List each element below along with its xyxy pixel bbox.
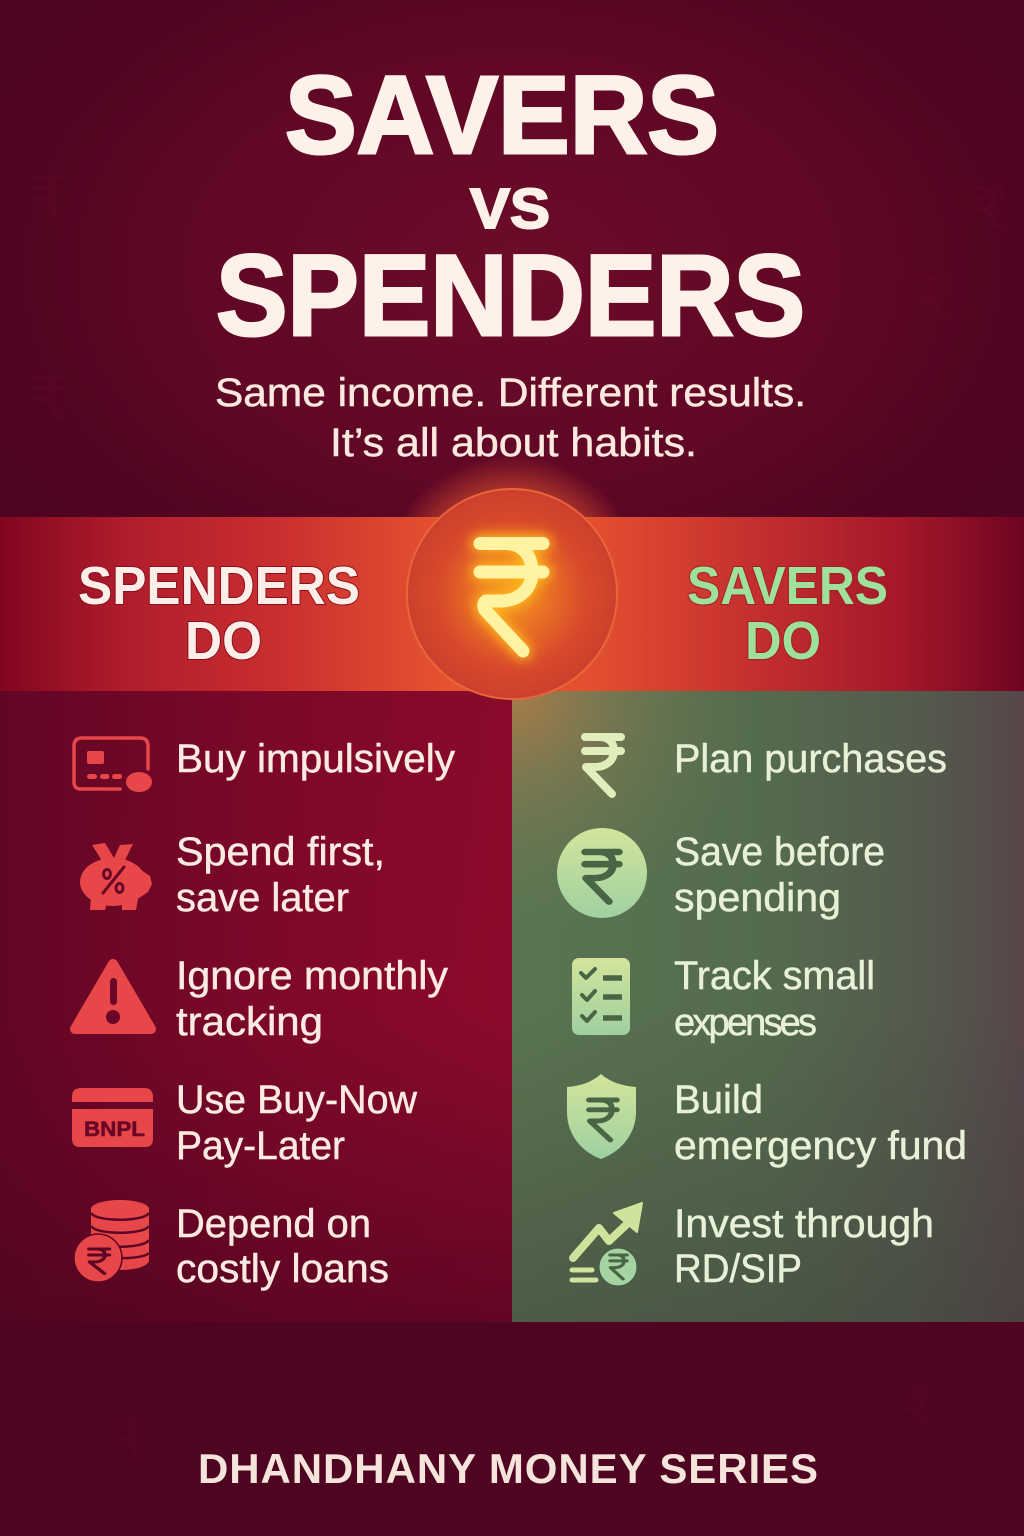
item: save before spending: Save before [674, 830, 885, 874]
icon: shield [567, 1074, 636, 1159]
item: invest: RD/SIP [674, 1247, 802, 1291]
icon: coin stack with rupee [74, 1200, 149, 1282]
panel: spenders [0, 690, 512, 1322]
item: emergency fund: Build [674, 1078, 763, 1122]
icon: rupee circle [557, 828, 647, 918]
header band [0, 517, 1024, 691]
item: save before spending: spending [674, 876, 841, 920]
item: ignore tracking: Ignore monthly [176, 954, 448, 998]
savers do heading: DO [745, 611, 821, 671]
icon: checklist [572, 958, 630, 1035]
subtitle [215, 371, 806, 465]
faint rupee background pattern: ₹ [30, 166, 68, 233]
savers list [674, 737, 967, 1291]
item: use bnpl: Pay-Later [176, 1124, 345, 1168]
title: VS [470, 177, 550, 241]
title: SAVERS [285, 54, 719, 177]
faint rupee background pattern: ₹ [900, 1376, 938, 1443]
item: costly loans: Depend on [176, 1202, 371, 1246]
spenders do heading [78, 556, 360, 671]
item: spend first: Spend first, [176, 830, 385, 874]
item: costly loans: costly loans [176, 1247, 389, 1291]
icon: rupee [585, 737, 621, 794]
icon: credit card [74, 738, 152, 792]
icon: warning triangle [75, 964, 151, 1029]
item: track expenses: Track small [674, 954, 875, 998]
item: spend first: save later [176, 876, 349, 920]
item: track expenses: expenses [674, 1002, 817, 1044]
faint rupee background pattern: ₹ [915, 266, 953, 333]
savers do heading: SAVERS [687, 556, 888, 616]
faint rupee background pattern: ₹ [110, 1406, 148, 1473]
item: ignore tracking: tracking [176, 1000, 323, 1044]
faint rupee background pattern: ₹ [970, 176, 1008, 243]
spenders do heading: SPENDERS [78, 556, 360, 616]
title [216, 54, 805, 360]
faint rupee background pattern: ₹ [30, 366, 68, 433]
footer: DHANDHANY MONEY SERIES [198, 1445, 818, 1492]
item: emergency fund: emergency fund [674, 1124, 967, 1168]
savers do heading [687, 556, 888, 671]
item: plan purchases: Plan purchases [674, 737, 947, 781]
icon: bnpl card [72, 1088, 153, 1147]
subtitle: Same income. Different results. [215, 371, 806, 415]
item: buy impulsively: Buy impulsively [176, 737, 455, 781]
central rupee coin [382, 387, 642, 699]
item: invest: Invest through [674, 1202, 934, 1246]
icon: growth arrow with coin [572, 1203, 642, 1286]
icon: piggy bank [80, 843, 152, 910]
title: SPENDERS [216, 232, 805, 360]
item: use bnpl: Use Buy-Now [176, 1078, 417, 1122]
subtitle: It’s all about habits. [330, 421, 697, 465]
icon: bnpl card: BNPL [84, 1118, 145, 1141]
spenders list [176, 737, 455, 1291]
spenders do heading: DO [185, 611, 262, 671]
panel: savers [512, 690, 1024, 1322]
